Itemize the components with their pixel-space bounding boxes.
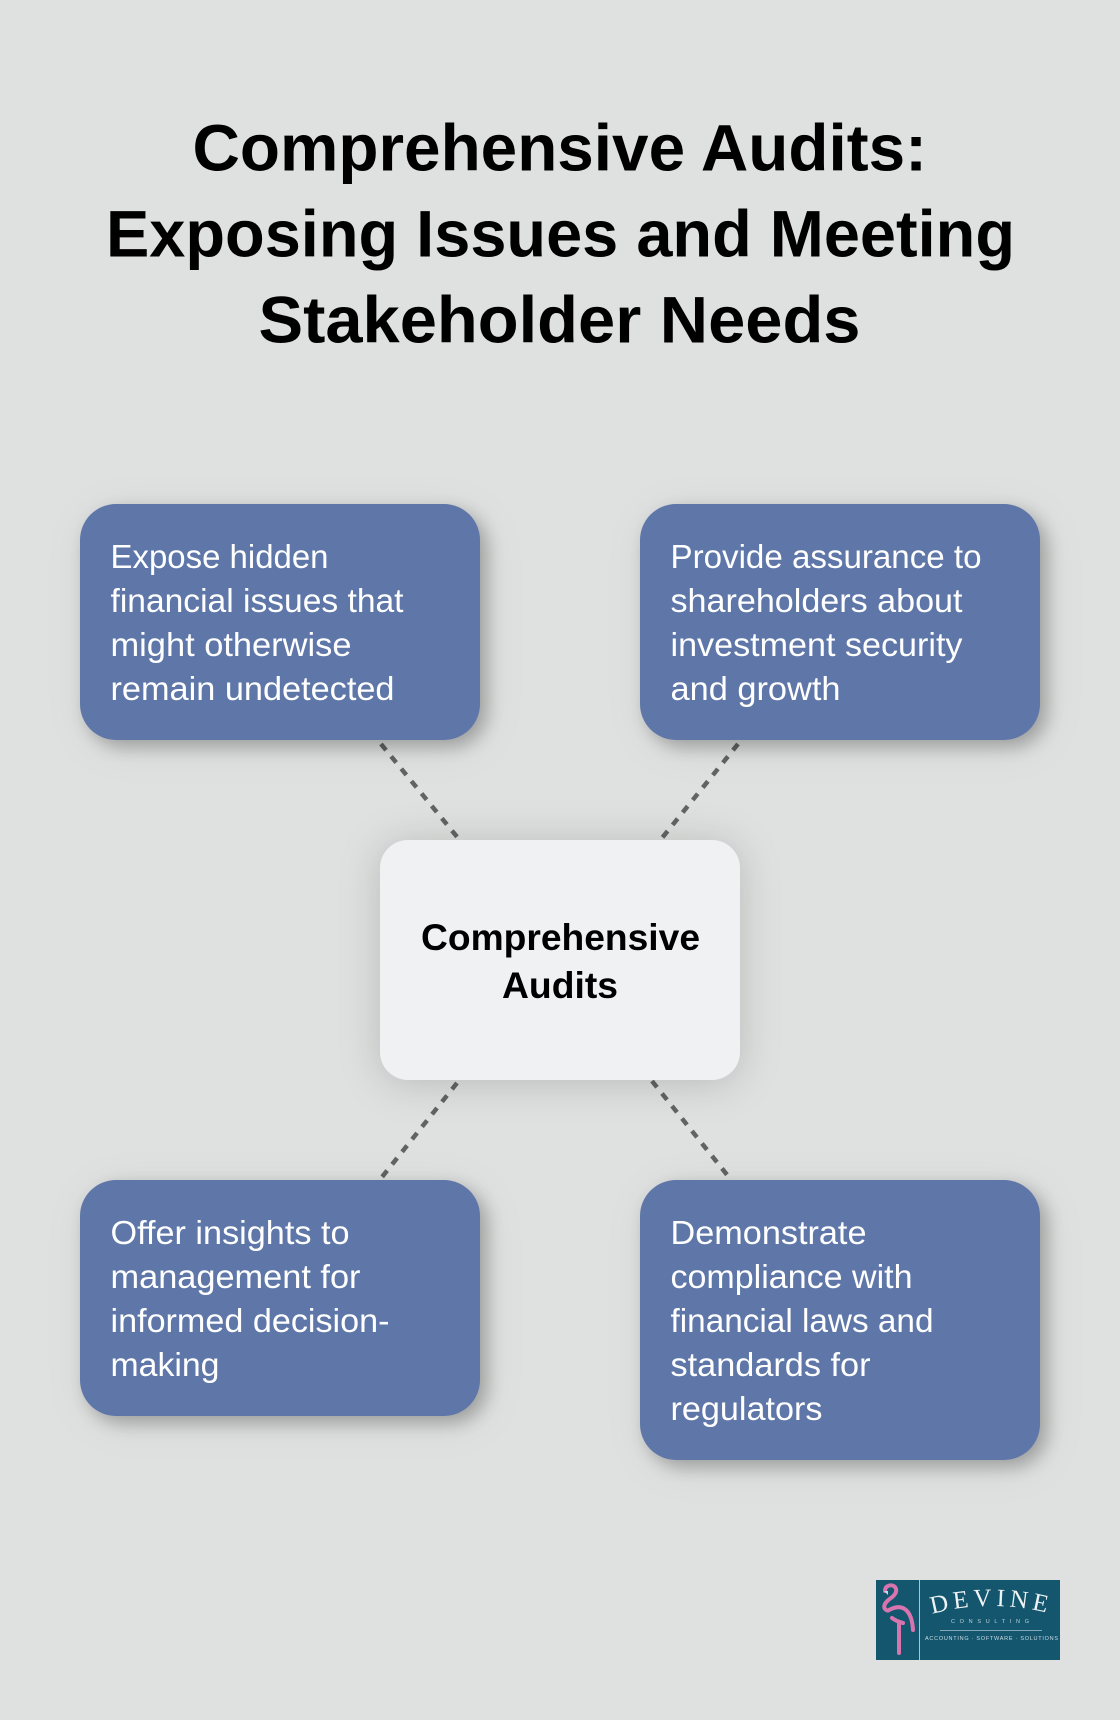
panel: demonstrate compliance: compliance with bbox=[670, 1258, 912, 1295]
panel: demonstrate compliance: financial laws and bbox=[670, 1302, 934, 1339]
icon: flamingo bbox=[884, 1585, 913, 1653]
panel: offer insights: informed decision- bbox=[110, 1302, 390, 1339]
panel: provide assurance bbox=[640, 504, 1040, 740]
title bbox=[106, 110, 1015, 356]
panel: provide assurance: investment security bbox=[670, 626, 963, 663]
panel: expose hidden issues: Expose hidden bbox=[110, 538, 328, 575]
connector: bottom left bbox=[382, 1083, 457, 1177]
panel: demonstrate compliance: Demonstrate bbox=[670, 1214, 866, 1251]
panel: demonstrate compliance bbox=[640, 1180, 1040, 1460]
title: Comprehensive Audits: bbox=[192, 110, 927, 184]
panel: demonstrate compliance: standards for bbox=[670, 1346, 871, 1383]
panel: expose hidden issues: financial issues that bbox=[110, 582, 404, 619]
panel: demonstrate compliance: regulators bbox=[670, 1390, 822, 1427]
title: Stakeholder Needs bbox=[258, 282, 860, 356]
connector: bottom right bbox=[652, 1081, 732, 1181]
panel: expose hidden issues: might otherwise bbox=[110, 626, 352, 663]
panel: expose hidden issues: remain undetected bbox=[110, 670, 394, 707]
panel: provide assurance: and growth bbox=[670, 670, 840, 707]
logo: Devine Consulting bbox=[876, 1580, 1060, 1660]
connector: top left bbox=[381, 744, 458, 838]
logo: Devine Consulting: CONSULTING bbox=[951, 1619, 1029, 1625]
panel: center node: Audits bbox=[502, 965, 618, 1006]
connector: top right bbox=[662, 744, 738, 838]
logo: Devine Consulting: DEVINE bbox=[929, 1590, 1048, 1614]
panel: provide assurance: Provide assurance to bbox=[670, 538, 982, 575]
panel: center node: Comprehensive bbox=[421, 917, 700, 958]
panel: offer insights bbox=[80, 1180, 480, 1416]
title: Exposing Issues and Meeting bbox=[106, 196, 1015, 270]
panel: provide assurance: shareholders about bbox=[670, 582, 962, 619]
panel: offer insights: making bbox=[110, 1346, 220, 1383]
panel: expose hidden issues bbox=[80, 504, 480, 740]
panel: offer insights: Offer insights to bbox=[110, 1214, 350, 1251]
panel: offer insights: management for bbox=[110, 1258, 360, 1295]
panel: center node bbox=[380, 840, 740, 1080]
logo: Devine Consulting: ACCOUNTING · SOFTWARE · SOLUTIONS bbox=[925, 1636, 1058, 1642]
